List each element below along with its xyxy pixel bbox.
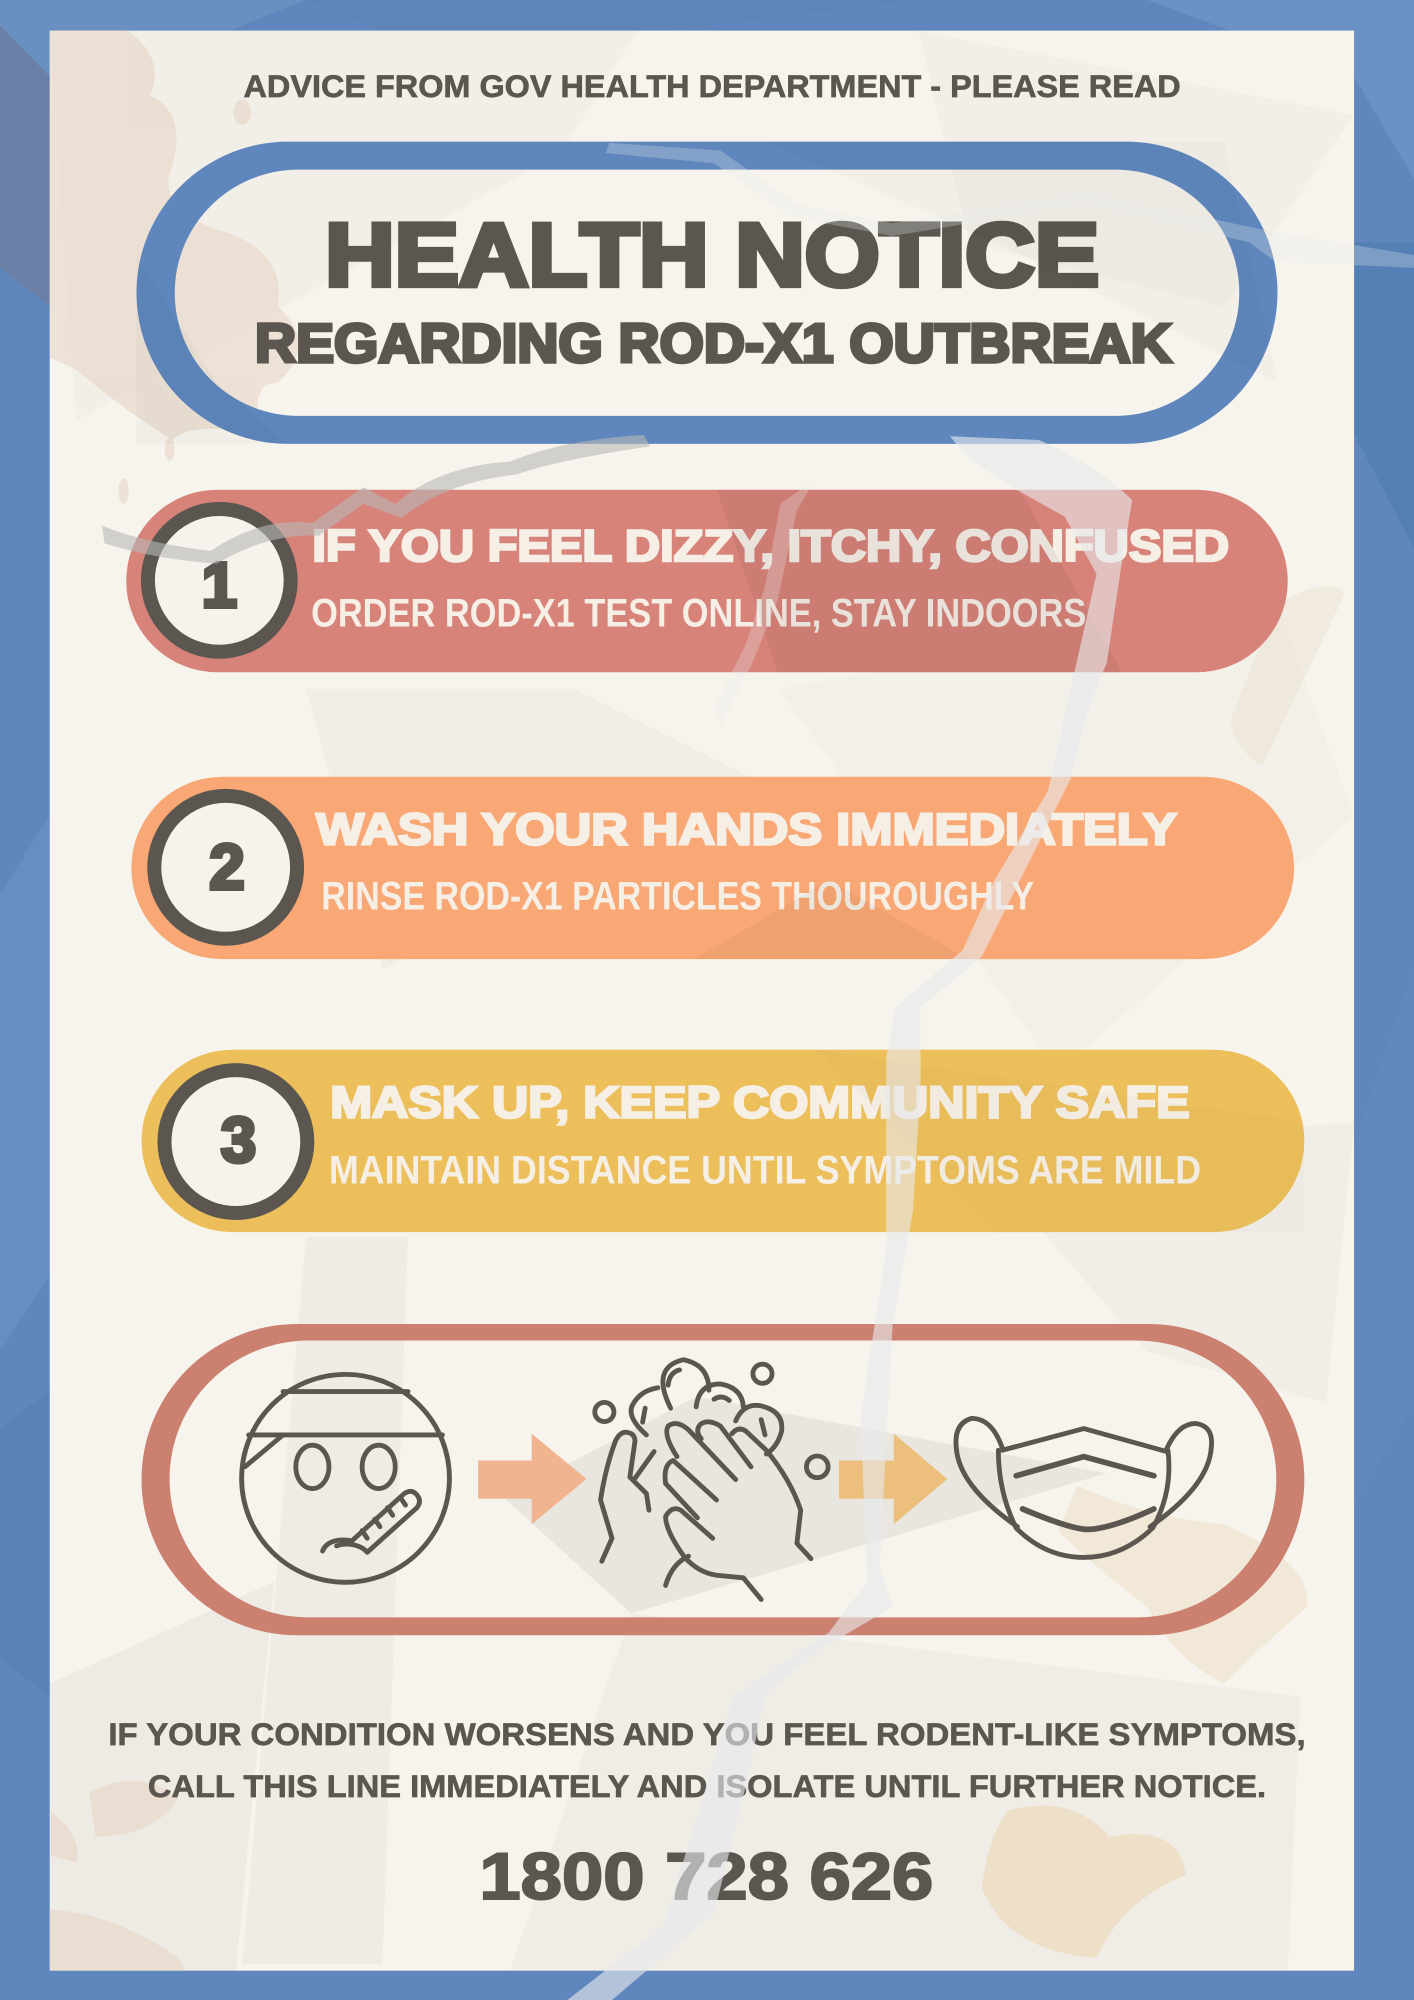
number badge 3: 3: [221, 1104, 256, 1176]
step 3 detail: MAINTAIN DISTANCE UNTIL SYMPTOMS ARE MILD: [329, 1149, 1201, 1193]
torn paper: thin crack: [606, 143, 1414, 727]
facet shading over content: [136, 142, 1304, 1232]
step 2 heading: WASH YOUR HANDS IMMEDIATELY: [316, 805, 1177, 854]
number badge 1: [148, 509, 291, 652]
step 2 detail: RINSE ROD-X1 PARTICLES THOUROUGHLY: [321, 874, 1034, 918]
step 3 panel: [142, 1050, 1304, 1232]
icon: sick face with thermometer: [242, 1374, 449, 1582]
stain: lower left: [50, 1781, 185, 1971]
number badge 2: 2: [209, 831, 245, 903]
red pill outline: [142, 1324, 1304, 1635]
number badge 2: [154, 796, 297, 939]
subheading: REGARDING ROD-X1 OUTBREAK: [255, 312, 1172, 374]
number badge 3: [164, 1070, 307, 1213]
step 1 heading: IF YOU FEEL DIZZY, ITCHY, CONFUSED: [312, 522, 1229, 571]
phone number: 1800 728 626: [479, 1840, 933, 1914]
callout text: CALL THIS LINE IMMEDIATELY AND ISOLATE UNTIL FURTHER NOTICE.: [148, 1769, 1266, 1804]
step 1 detail: ORDER ROD-X1 TEST ONLINE, STAY INDOORS: [311, 591, 1086, 635]
step 3 heading: MASK UP, KEEP COMMUNITY SAFE: [330, 1078, 1190, 1127]
stain: top left splash: [50, 31, 298, 504]
callout text: IF YOUR CONDITION WORSENS AND YOU FEEL RODENT-LIKE SYMPTOMS,: [108, 1717, 1306, 1752]
stain: bottom right: [1058, 1486, 1307, 1684]
step 2 panel: [131, 777, 1294, 959]
number badge 1: 1: [202, 549, 237, 621]
arrow to mask: [839, 1434, 947, 1524]
heading: HEALTH NOTICE: [325, 205, 1099, 305]
stain: bottom centre: [982, 1805, 1186, 1958]
callout text: [108, 1717, 1306, 1804]
step 1 panel: [126, 490, 1288, 672]
blue pill outline: [136, 142, 1278, 444]
icon: face mask: [956, 1418, 1212, 1557]
top advice line: ADVICE FROM GOV HEALTH DEPARTMENT - PLEASE READ: [244, 69, 1181, 104]
arrow to hand washing: [478, 1434, 587, 1524]
red pill: [126, 490, 1288, 672]
icon strip panel: [142, 1324, 1304, 1635]
torn paper: white tear: [567, 436, 1132, 2000]
title pill: [136, 142, 1278, 444]
stain: small right: [1230, 586, 1345, 765]
yellow pill: [142, 1050, 1304, 1232]
orange pill: [131, 777, 1294, 959]
icon: washing hands: [595, 1360, 828, 1599]
torn paper: grey tear: [102, 435, 650, 564]
